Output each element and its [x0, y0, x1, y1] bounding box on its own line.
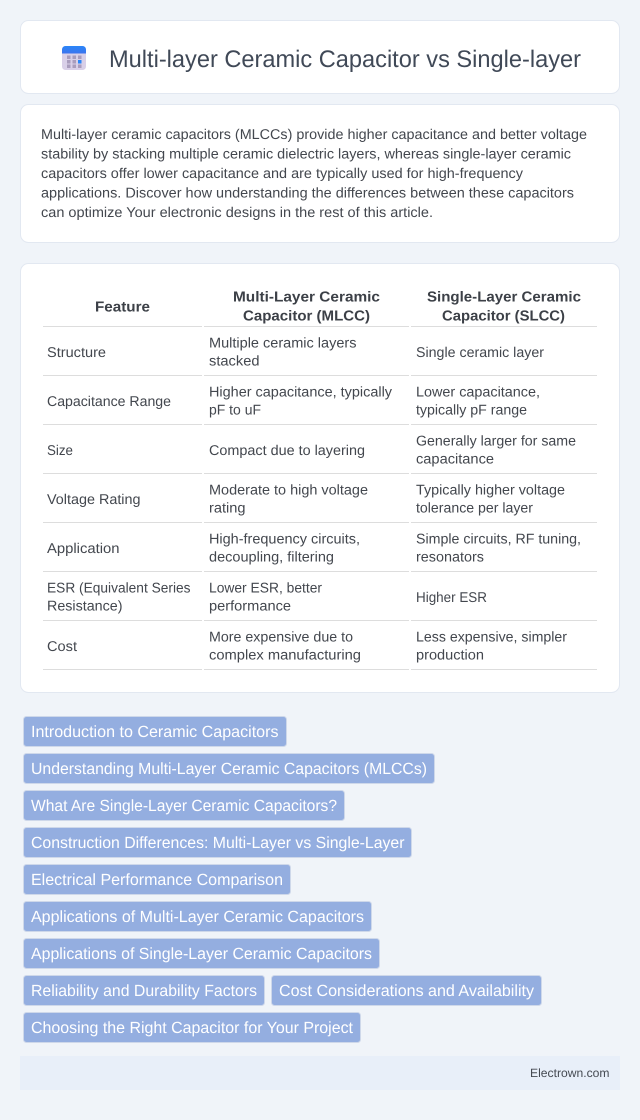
row: application: resonators	[416, 550, 484, 566]
panel: topic tags	[24, 716, 542, 1042]
tag: reliability	[24, 976, 264, 1006]
intro paragraph: capacitors offer lower capacitance and are typically used for high-frequency	[41, 166, 524, 182]
tag: choosing capacitor	[24, 1012, 360, 1042]
row: capacitance range: pF to uF	[209, 402, 261, 418]
tag: MLCC applications: Applications of Multi-Layer Ceramic Capacitors	[31, 908, 364, 926]
intro paragraph	[41, 127, 587, 221]
row: ESR: Resistance)	[47, 598, 122, 614]
tag: single-layer definition	[24, 790, 344, 820]
tag: cost considerations	[272, 976, 542, 1006]
row: ESR	[43, 580, 597, 621]
row: voltage rating: Voltage Rating	[47, 492, 140, 508]
row: voltage rating: Moderate to high voltage	[209, 482, 368, 498]
tag: MLCC applications	[24, 902, 372, 932]
tag: understanding MLCCs: Understanding Multi-Layer Ceramic Capacitors (MLCCs)	[31, 760, 427, 778]
row: ESR: Higher ESR	[416, 590, 487, 606]
header panel	[20, 20, 620, 94]
row: voltage rating: Typically higher voltage	[416, 482, 565, 498]
row: size: Compact due to layering	[209, 443, 365, 459]
table header row: Capacitor (SLCC)	[442, 308, 565, 324]
row: capacitance range: Higher capacitance, typically	[209, 384, 393, 400]
row: application: Simple circuits, RF tuning,	[416, 532, 581, 548]
title: Multi-layer Ceramic Capacitor vs Single-layer	[109, 46, 581, 73]
row: cost	[43, 630, 597, 670]
table header row: Capacitor (MLCC)	[243, 308, 370, 324]
row: size	[43, 434, 597, 474]
row: capacitance range: typically pF range	[416, 402, 527, 418]
panel: comparison table	[20, 264, 620, 692]
row: structure: Single ceramic layer	[416, 345, 544, 361]
tag: single-layer definition: What Are Single-Layer Ceramic Capacitors?	[31, 797, 337, 815]
footer credit: Electrown.com	[530, 1066, 610, 1080]
footer	[20, 1056, 620, 1090]
intro paragraph: stability by stacking multiple ceramic dielectric layers, whereas single-layer ceramic	[41, 146, 571, 162]
tag: electrical performance: Electrical Performance Comparison	[31, 871, 283, 889]
row: structure: Structure	[47, 345, 106, 361]
tag: introduction: Introduction to Ceramic Capacitors	[31, 723, 278, 741]
tag: choosing capacitor: Choosing the Right Capacitor for Your Project	[31, 1019, 353, 1037]
intro paragraph: can optimize Your electronic designs in the rest of this article.	[41, 205, 433, 221]
row: cost: production	[416, 648, 484, 664]
row: application	[43, 532, 597, 572]
row: ESR: performance	[209, 598, 291, 614]
table header row: Single-Layer Ceramic	[427, 290, 581, 306]
row: cost: Cost	[47, 639, 77, 655]
row: voltage rating: tolerance per layer	[416, 500, 533, 516]
tag: reliability: Reliability and Durability Factors	[31, 982, 257, 1000]
row: ESR: ESR (Equivalent Series	[47, 580, 190, 596]
tag: electrical performance	[24, 864, 290, 894]
row: capacitance range: Capacitance Range	[47, 394, 171, 410]
row: cost: More expensive due to	[209, 630, 353, 646]
row: capacitance range: Lower capacitance,	[416, 384, 540, 400]
row: voltage rating: rating	[209, 500, 246, 516]
row: cost: Less expensive, simpler	[416, 630, 567, 646]
table header row: Multi-Layer Ceramic	[233, 290, 380, 306]
intro paragraph: applications. Discover how understanding the differences between these capacitors	[41, 186, 574, 202]
table header row	[43, 290, 597, 327]
row: application: High-frequency circuits,	[209, 532, 360, 548]
panel: introduction	[20, 104, 620, 242]
row: size: Size	[47, 443, 73, 459]
row: voltage rating	[43, 482, 597, 523]
tag: cost considerations: Cost Considerations and Availability	[279, 982, 535, 1000]
row: size: capacitance	[416, 452, 494, 468]
tag: SLCC applications	[24, 938, 380, 968]
tag: construction differences	[24, 828, 412, 858]
intro paragraph: Multi-layer ceramic capacitors (MLCCs) provide higher capacitance and better voltage	[41, 127, 587, 143]
row: structure: Multiple ceramic layers	[209, 336, 356, 352]
row: application: decoupling, filtering	[209, 550, 334, 566]
icon: calendar grid	[62, 46, 86, 70]
tag: SLCC applications: Applications of Single-Layer Ceramic Capacitors	[31, 945, 372, 963]
tag: introduction	[24, 716, 286, 746]
table header row: Feature	[95, 300, 150, 316]
row: cost: complex manufacturing	[209, 648, 361, 664]
row: ESR: Lower ESR, better	[209, 580, 322, 596]
tag: understanding MLCCs	[24, 754, 434, 784]
row: capacitance range	[43, 384, 597, 425]
row: structure	[43, 336, 597, 376]
tag: construction differences: Construction Differences: Multi-Layer vs Single-Layer	[31, 834, 405, 852]
row: size: Generally larger for same	[416, 434, 576, 450]
row: application: Application	[47, 541, 120, 557]
row: structure: stacked	[209, 354, 260, 370]
